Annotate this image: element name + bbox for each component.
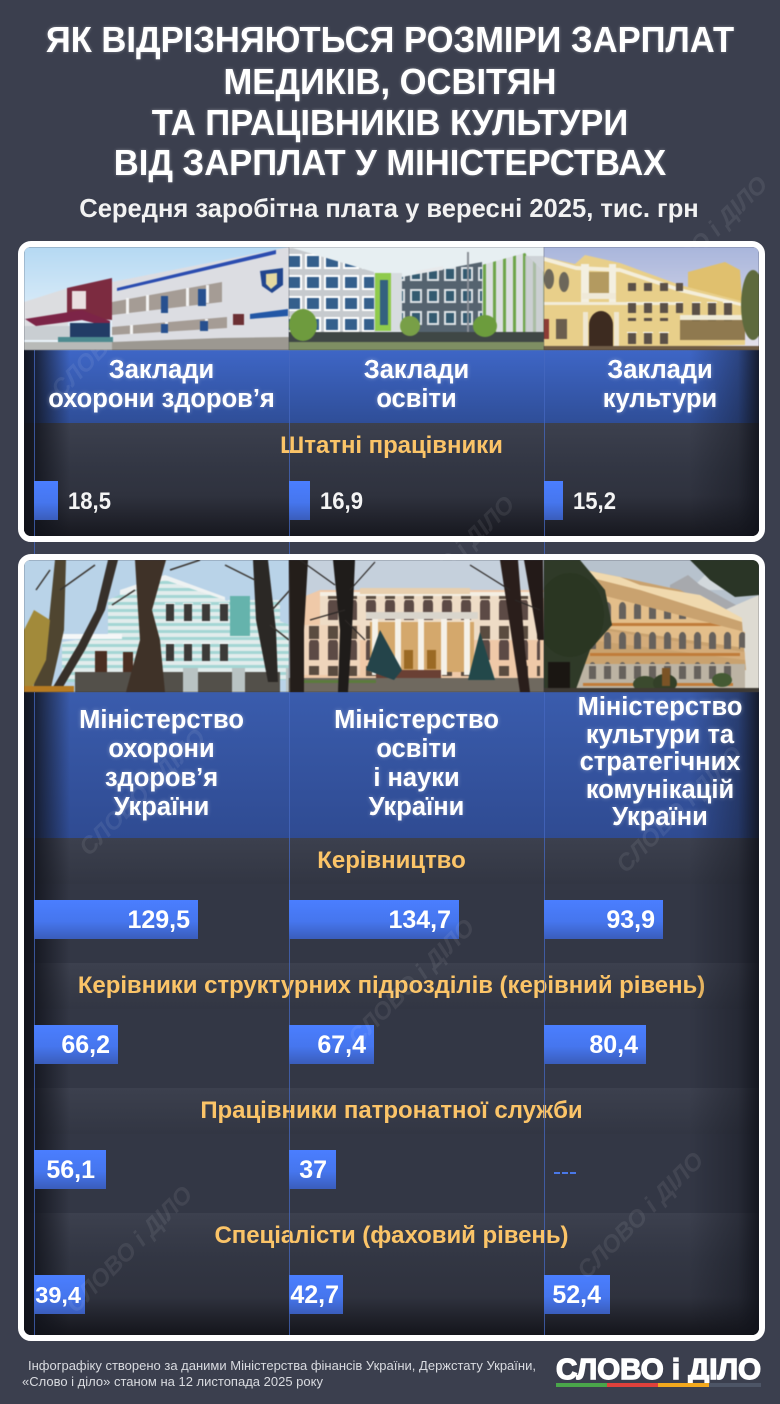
- bar: 52,4: [544, 1275, 610, 1314]
- photo: culture building: [543, 247, 759, 351]
- watermark: СЛОВО і ДІЛО: [74, 724, 211, 861]
- bar: 66,2: [34, 1025, 118, 1064]
- bottom shade: [24, 469, 759, 536]
- bar: 52,4: 52,4: [552, 1281, 601, 1309]
- title: ВІД ЗАРПЛАТ У МІНІСТЕРСТВАХ: [114, 142, 666, 183]
- header: education ministry: [334, 706, 500, 822]
- value: 15,2: 15,2: [573, 488, 616, 515]
- bar: culture staff 15,2: [544, 481, 563, 520]
- header: health ministry: Міністерство: [79, 706, 244, 734]
- header: health ministry: [78, 706, 245, 822]
- source note: Інфографіку створено за даними Міністерства фінансів України, Держстату України,: [28, 1358, 536, 1373]
- bar: 56,1: 56,1: [46, 1156, 95, 1184]
- bar: 93,9: [544, 900, 663, 939]
- row heading: leadership: [24, 838, 759, 884]
- watermark: СЛОВО і ДІЛО: [46, 266, 183, 403]
- header: culture ministry: [577, 693, 744, 832]
- header band: [24, 350, 759, 423]
- photo: hospital: [24, 247, 290, 351]
- row heading: staff: [24, 423, 759, 469]
- bar: 67,4: [289, 1025, 374, 1064]
- header: education facilities: [364, 356, 470, 413]
- header band: [24, 692, 759, 838]
- bar: 67,4: 67,4: [317, 1031, 366, 1059]
- logo: СЛОВО і ДІЛО: [556, 1354, 761, 1386]
- bar: 39,4: [34, 1275, 85, 1314]
- header: culture ministry: комунікацій: [586, 776, 734, 804]
- header: health ministry: України: [114, 793, 209, 821]
- bar: 42,7: 42,7: [290, 1281, 339, 1309]
- value: 16,9: 16,9: [320, 488, 363, 515]
- header: education ministry: освіти: [376, 735, 457, 763]
- title: ТА ПРАЦІВНИКІВ КУЛЬТУРИ: [152, 102, 628, 143]
- row heading: heads of structural units: Керівники структурних підрозділів (керівний рівень): [78, 972, 705, 999]
- title: МЕДИКІВ, ОСВІТЯН: [223, 61, 557, 102]
- header: education ministry: Міністерство: [334, 706, 499, 734]
- header: health facilities: Заклади: [109, 356, 214, 384]
- header: culture ministry: стратегічних: [580, 748, 740, 776]
- bar: 66,2: 66,2: [61, 1031, 110, 1059]
- header: health facilities: [47, 356, 276, 414]
- panel: ministries: [18, 554, 765, 1341]
- header: culture facilities: Заклади: [607, 356, 713, 384]
- bar: 134,7: 134,7: [388, 906, 451, 934]
- bar: 80,4: [544, 1025, 646, 1064]
- no data mark: [554, 1172, 577, 1174]
- title: [46, 19, 736, 184]
- watermark: СЛОВО і ДІЛО: [572, 1147, 709, 1284]
- photo: education ministry: [288, 560, 544, 693]
- header: health facilities: охорони здоров’я: [48, 385, 275, 413]
- row heading: heads of structural units: [24, 963, 759, 1009]
- header: education ministry: і науки: [373, 764, 460, 792]
- bar: education staff 16,9: [289, 481, 310, 520]
- row heading: specialists: Спеціалісти (фаховий рівень): [214, 1222, 569, 1249]
- header: culture facilities: культури: [603, 385, 717, 413]
- photo: school: [288, 247, 544, 351]
- bar: 37: [289, 1150, 336, 1189]
- header: health ministry: охорони: [108, 735, 215, 763]
- header: education ministry: України: [369, 793, 464, 821]
- bar: 42,7: [289, 1275, 343, 1314]
- bar: 39,4: 39,4: [35, 1282, 81, 1308]
- watermark: СЛОВО і ДІЛО: [611, 741, 748, 878]
- source note: «Слово і діло» станом на 12 листопада 2025 року: [22, 1374, 323, 1389]
- panel: institutions: [18, 241, 765, 542]
- bar: 93,9: 93,9: [606, 906, 655, 934]
- photo: culture ministry: [543, 560, 759, 693]
- header: education facilities: Заклади: [364, 356, 469, 384]
- bar: 129,5: [34, 900, 198, 939]
- header: culture ministry: України: [612, 803, 708, 831]
- header: health ministry: здоров’я: [105, 764, 218, 792]
- bar: health staff 18,5: [34, 481, 58, 520]
- header: culture facilities: [602, 356, 718, 414]
- value: 18,5: 18,5: [68, 488, 111, 515]
- watermark: СЛОВО і ДІЛО: [636, 171, 773, 308]
- header: culture ministry: Міністерство: [578, 693, 742, 721]
- row heading: patronage service: [24, 1088, 759, 1134]
- watermark: СЛОВО і ДІЛО: [343, 914, 480, 1051]
- row heading: staff: Штатні працівники: [280, 432, 503, 459]
- photo: health ministry: [24, 560, 290, 693]
- bar: 56,1: [34, 1150, 106, 1189]
- bar: 129,5: 129,5: [127, 906, 190, 934]
- title: ЯК ВІДРІЗНЯЮТЬСЯ РОЗМІРИ ЗАРПЛАТ: [46, 19, 734, 60]
- watermark: СЛОВО і ДІЛО: [61, 1181, 198, 1318]
- row heading: leadership: Керівництво: [317, 847, 466, 874]
- bar: 80,4: 80,4: [589, 1031, 638, 1059]
- bar: 37: 37: [299, 1156, 327, 1184]
- header: culture ministry: культури та: [586, 720, 734, 748]
- watermark: СЛОВО і ДІЛО: [383, 491, 520, 628]
- source note: [22, 1358, 536, 1389]
- subtitle: Середня заробітна плата у вересні 2025, тис. грн: [79, 193, 699, 223]
- row heading: patronage service: Працівники патронатної служби: [200, 1097, 583, 1124]
- header: education facilities: освіти: [376, 385, 457, 413]
- bar: 134,7: [289, 900, 459, 939]
- row heading: specialists: [24, 1213, 759, 1259]
